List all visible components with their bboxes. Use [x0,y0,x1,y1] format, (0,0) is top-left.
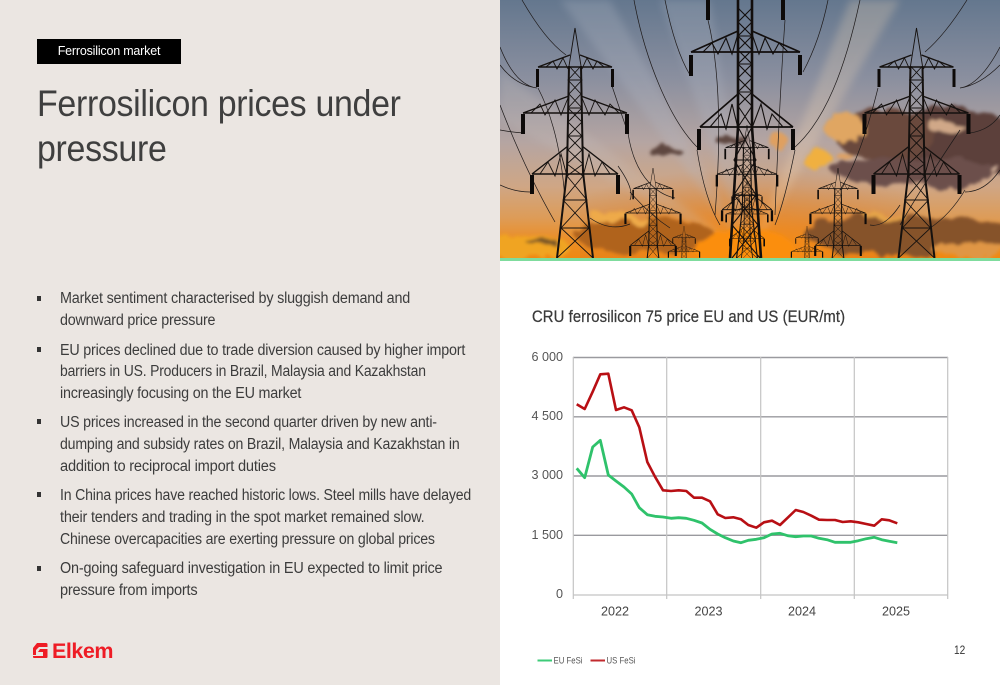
bullet 3: US prices increased in the second quarter driven by new anti- [60,414,437,430]
clouds [492,108,1000,270]
text block: market commentary bullets [37,290,471,599]
chart title: CRU ferrosilicon 75 price EU and US (EUR/mt) [532,308,845,326]
title: Ferrosilicon prices under [37,82,401,124]
legend: EU and US FeSi: US FeSi [606,656,636,666]
tag: Ferrosilicon market [37,39,181,64]
bullet 3: dumping and subsidy rates on Brazil, Malaysia and Kazakhstan in [60,436,460,452]
bullet 5: pressure from imports [60,582,197,599]
legend: EU and US FeSi: EU FeSi [554,656,582,666]
bullet 3: addition to reciprocal import duties [60,458,276,474]
bullet 1: Market sentiment characterised by sluggish demand and [60,290,410,307]
logo: Elkem [33,639,113,663]
bullet 1: downward price pressure [60,312,215,329]
y axis labels: 6 000 [531,350,563,364]
bullet 4 [37,486,471,548]
bullet 4: their tenders and trading in the spot market remained slow. [60,508,424,526]
bullet 4: Chinese overcapacities are exerting pressure on global prices [60,530,435,548]
panel: left text panel [0,0,500,685]
accent: green photo rule [500,258,1000,261]
x axis labels: 2023 [694,604,723,618]
series: US FeSi [577,374,897,528]
title [37,82,401,169]
sky [500,0,1000,259]
y axis labels: 4 500 [531,409,563,423]
bullet 5: On-going safeguard investigation in EU expected to limit price [60,560,442,577]
bullet 2: barriers in US. Producers in Brazil, Malaysia and Kazakhstan [60,363,426,380]
sun rays [500,0,900,255]
photo: transmission towers at sunset [500,0,1000,258]
right tower [862,28,970,258]
legend: EU and US FeSi [538,656,636,666]
y axis labels: 1 500 [531,528,563,542]
y axis labels [531,350,563,601]
page number: 12 [954,645,965,657]
bullet 3 [37,414,460,474]
bullet 1 [37,290,410,329]
distant towers [624,125,867,295]
bullet 2: increasingly focusing on the EU market [60,385,301,402]
bullet 2 [37,342,466,402]
logo wordmark: Elkem [52,639,113,663]
power lines [500,0,1000,228]
left tower [521,28,629,258]
x axis labels: 2024 [788,604,816,618]
series: EU FeSi [577,440,897,543]
y axis labels: 3 000 [531,468,563,482]
grid lines [573,357,948,599]
x axis labels: 2025 [882,604,910,618]
y axis labels: 0 [556,587,563,601]
icon: Elkem mark [33,643,48,658]
x axis labels: 2022 [601,604,629,618]
tag: Ferrosilicon market: Ferrosilicon market [58,44,160,58]
title: pressure [37,127,167,169]
line chart: CRU ferrosilicon price [531,350,948,618]
bullet 2: EU prices declined due to trade diversion caused by higher import [60,342,465,358]
x axis labels [601,604,910,618]
bullet 4: In China prices have reached historic lows. Steel mills have delayed [60,486,471,504]
centre tower [689,0,802,258]
bullet 5 [37,560,442,599]
